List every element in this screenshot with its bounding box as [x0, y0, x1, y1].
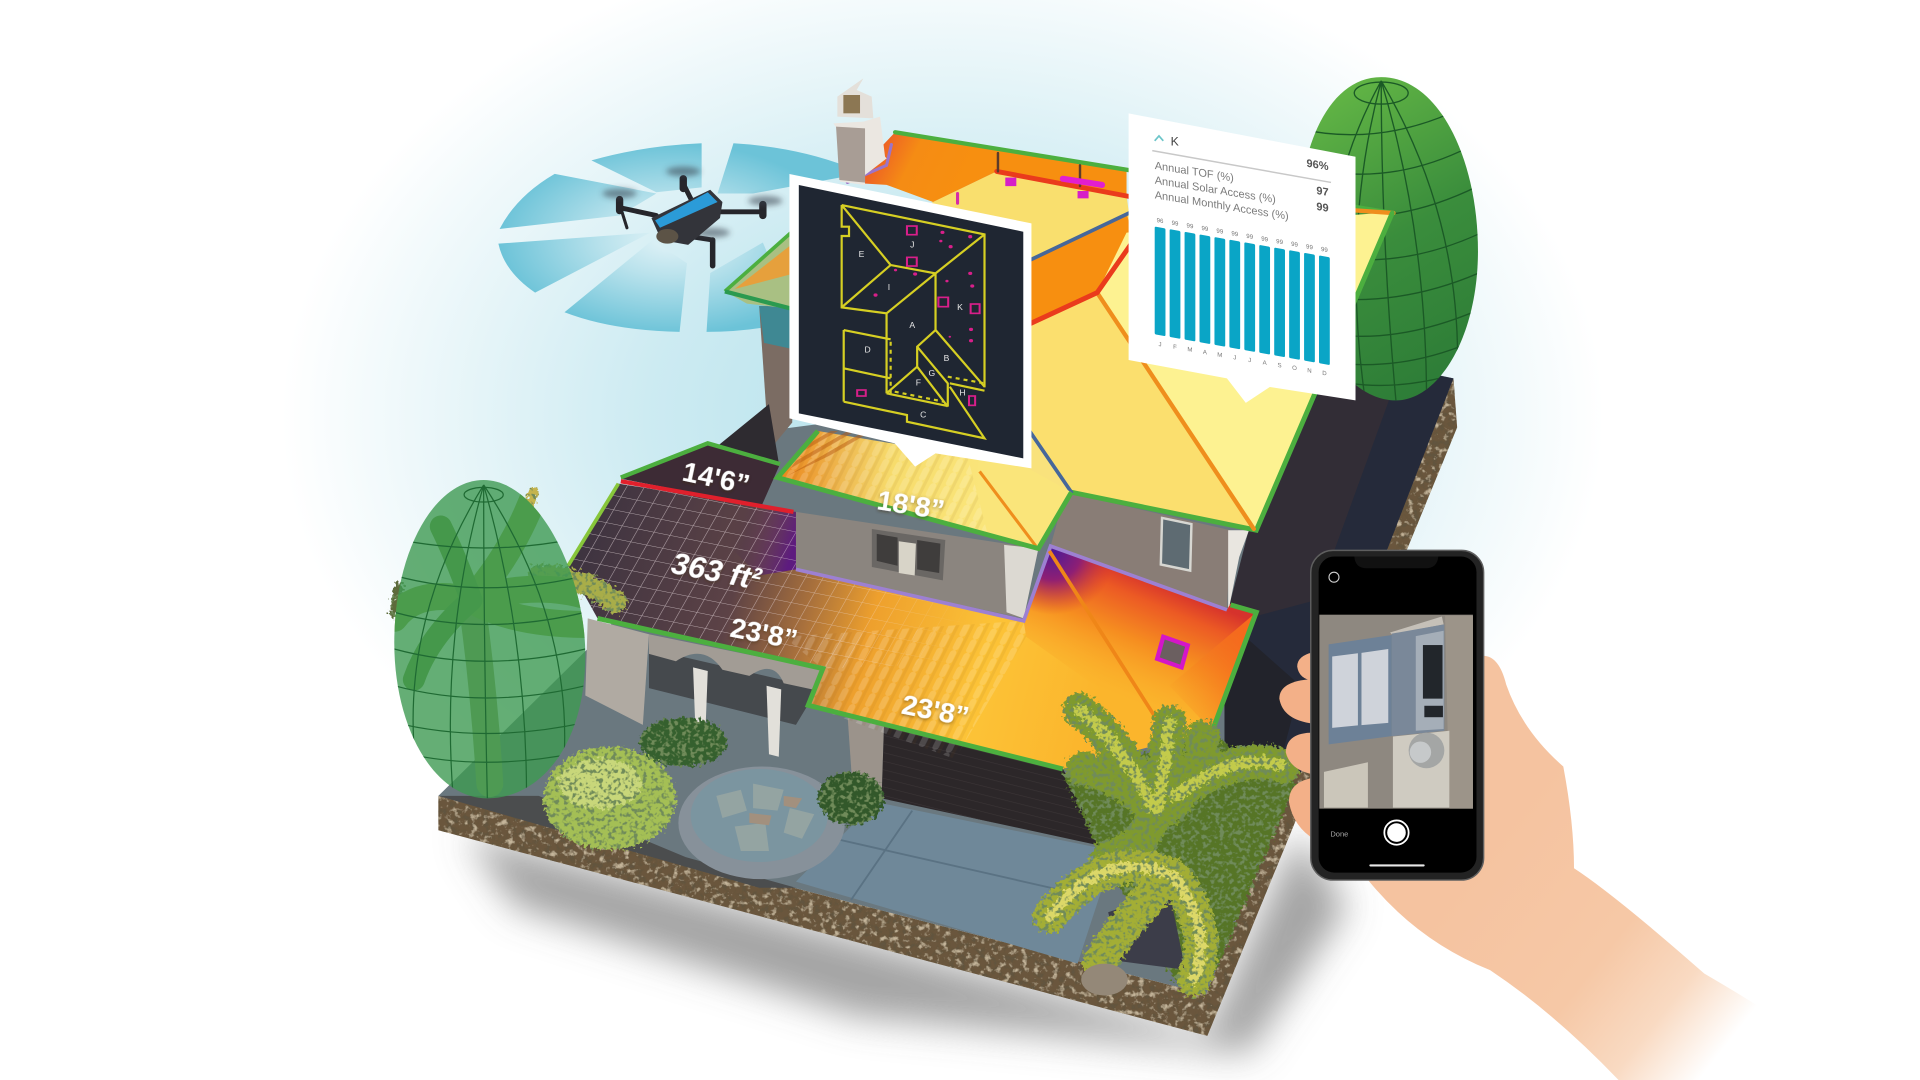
flash icon: [1329, 572, 1339, 582]
house walls: [585, 306, 1390, 847]
palm fronds outside dome: [394, 492, 616, 612]
phone body: [1311, 550, 1484, 880]
monthly bar chart: J: [1159, 341, 1162, 349]
infographic scene: [342, 0, 1749, 1080]
monthly bar chart: M: [1217, 351, 1222, 359]
floor plan section letters: B: [944, 353, 950, 363]
porch columns: [693, 667, 781, 757]
notch: [1354, 556, 1438, 568]
home bar: [1369, 864, 1425, 867]
ground shadow: [465, 833, 1347, 1053]
monthly bar chart: 99: [1276, 238, 1284, 246]
monthly bar chart: M: [1187, 346, 1193, 354]
measurement: 18'8": 18'8”: [875, 484, 947, 525]
platform: soil block and ground: [438, 355, 1457, 1036]
monthly bar chart: 99: [1231, 230, 1239, 238]
monthly bar chart: 99: [1201, 225, 1209, 233]
side window: [1161, 518, 1191, 571]
floor plan section letters: D: [864, 345, 871, 355]
shutter button: [1384, 820, 1409, 845]
drone: [602, 167, 782, 266]
monthly bar chart: 96: [1157, 217, 1164, 225]
metrics: Annual TOF (%): [1155, 160, 1234, 185]
floor plan section letters: C: [920, 410, 926, 420]
shaded ground under palm: [1108, 891, 1185, 970]
monthly bar chart: A: [1203, 349, 1208, 357]
floor plan section letters: K: [957, 302, 963, 312]
monthly bar chart: D: [1322, 370, 1327, 378]
card header: K: [1171, 135, 1180, 149]
chimney: [833, 78, 887, 185]
monthly bar chart: 99: [1261, 235, 1269, 244]
monthly bar chart: S: [1278, 362, 1282, 370]
camera photo: [1319, 615, 1473, 809]
lower fronds: [1051, 867, 1201, 980]
monthly bar chart: 99: [1216, 228, 1224, 236]
arm and palm: [1369, 656, 1769, 1080]
upper fronds: [1080, 710, 1283, 857]
monthly bar chart: 99: [1246, 233, 1254, 241]
back roof planes: [796, 132, 1393, 549]
palm inside dome: [394, 490, 612, 784]
drone scan fan: [498, 143, 847, 332]
right tree: shading dome: [1298, 77, 1482, 400]
monthly bar chart: 99: [1321, 246, 1328, 254]
front gable roof: [778, 431, 1071, 549]
rock: [1081, 964, 1128, 996]
roof outline: [842, 205, 985, 438]
metrics: 97: [1316, 185, 1329, 199]
floor plan section letters: A: [909, 320, 915, 330]
floor plan card: [789, 174, 1031, 468]
done label: Done: [1330, 830, 1348, 839]
monthly bar chart: N: [1307, 367, 1312, 375]
left tree: palm and shading dome: [394, 480, 616, 798]
metrics: 99: [1316, 201, 1329, 215]
monthly bar chart: 99: [1187, 222, 1194, 231]
floor plan section letters: H: [959, 388, 966, 398]
monthly bar chart: [1155, 217, 1330, 378]
upper floor window: [872, 529, 945, 580]
monthly bar chart: J: [1248, 357, 1251, 364]
floor plan section letters: E: [859, 249, 865, 259]
bushes: [544, 718, 884, 850]
front solar roof: [568, 484, 1256, 769]
solar access card: [1129, 113, 1356, 403]
monthly bar chart: 99: [1291, 241, 1298, 249]
skylight: [1157, 637, 1188, 667]
side gable roof by drone: [725, 233, 791, 309]
floor plan section letters: G: [929, 368, 936, 378]
metrics: 96%: [1307, 158, 1329, 173]
monthly bar chart: A: [1263, 359, 1268, 367]
measurement: 23'8" front: 23'8”: [899, 689, 972, 732]
metrics: [1155, 158, 1329, 223]
measurement: 14'6": 14'6”: [680, 456, 753, 500]
measurement: 23'8" eave: 23'8”: [728, 612, 800, 655]
roof vent marks: [1005, 178, 1089, 198]
monthly bar chart: J: [1233, 354, 1236, 362]
phone screen: [1319, 556, 1476, 873]
monthly bar chart: 99: [1306, 243, 1313, 252]
card header: [1152, 135, 1331, 182]
floor plan section letters: I: [888, 282, 890, 292]
monthly bar chart: O: [1292, 365, 1297, 372]
driveway joints: [835, 811, 1078, 900]
floor plan section letters: J: [910, 239, 914, 249]
metrics: Annual Monthly Access (%): [1155, 189, 1289, 223]
roof lines: [847, 132, 1393, 530]
right garden foliage: [1063, 735, 1296, 992]
dark rear roof section: [621, 443, 793, 512]
floor plan section letters: F: [916, 378, 921, 388]
hand holding phone: [1279, 550, 1769, 1080]
measurement: 363 ft2: 363 ft²: [669, 546, 764, 597]
palm tree: [1051, 710, 1283, 980]
metrics: Annual Solar Access (%): [1155, 175, 1276, 206]
fingers: [1279, 652, 1317, 840]
floor plan section letters: [859, 239, 966, 420]
monthly bar chart: 99: [1172, 220, 1179, 228]
monthly bar chart: F: [1173, 344, 1177, 351]
paved circle: [678, 767, 845, 879]
obstruction markers: [857, 226, 980, 405]
